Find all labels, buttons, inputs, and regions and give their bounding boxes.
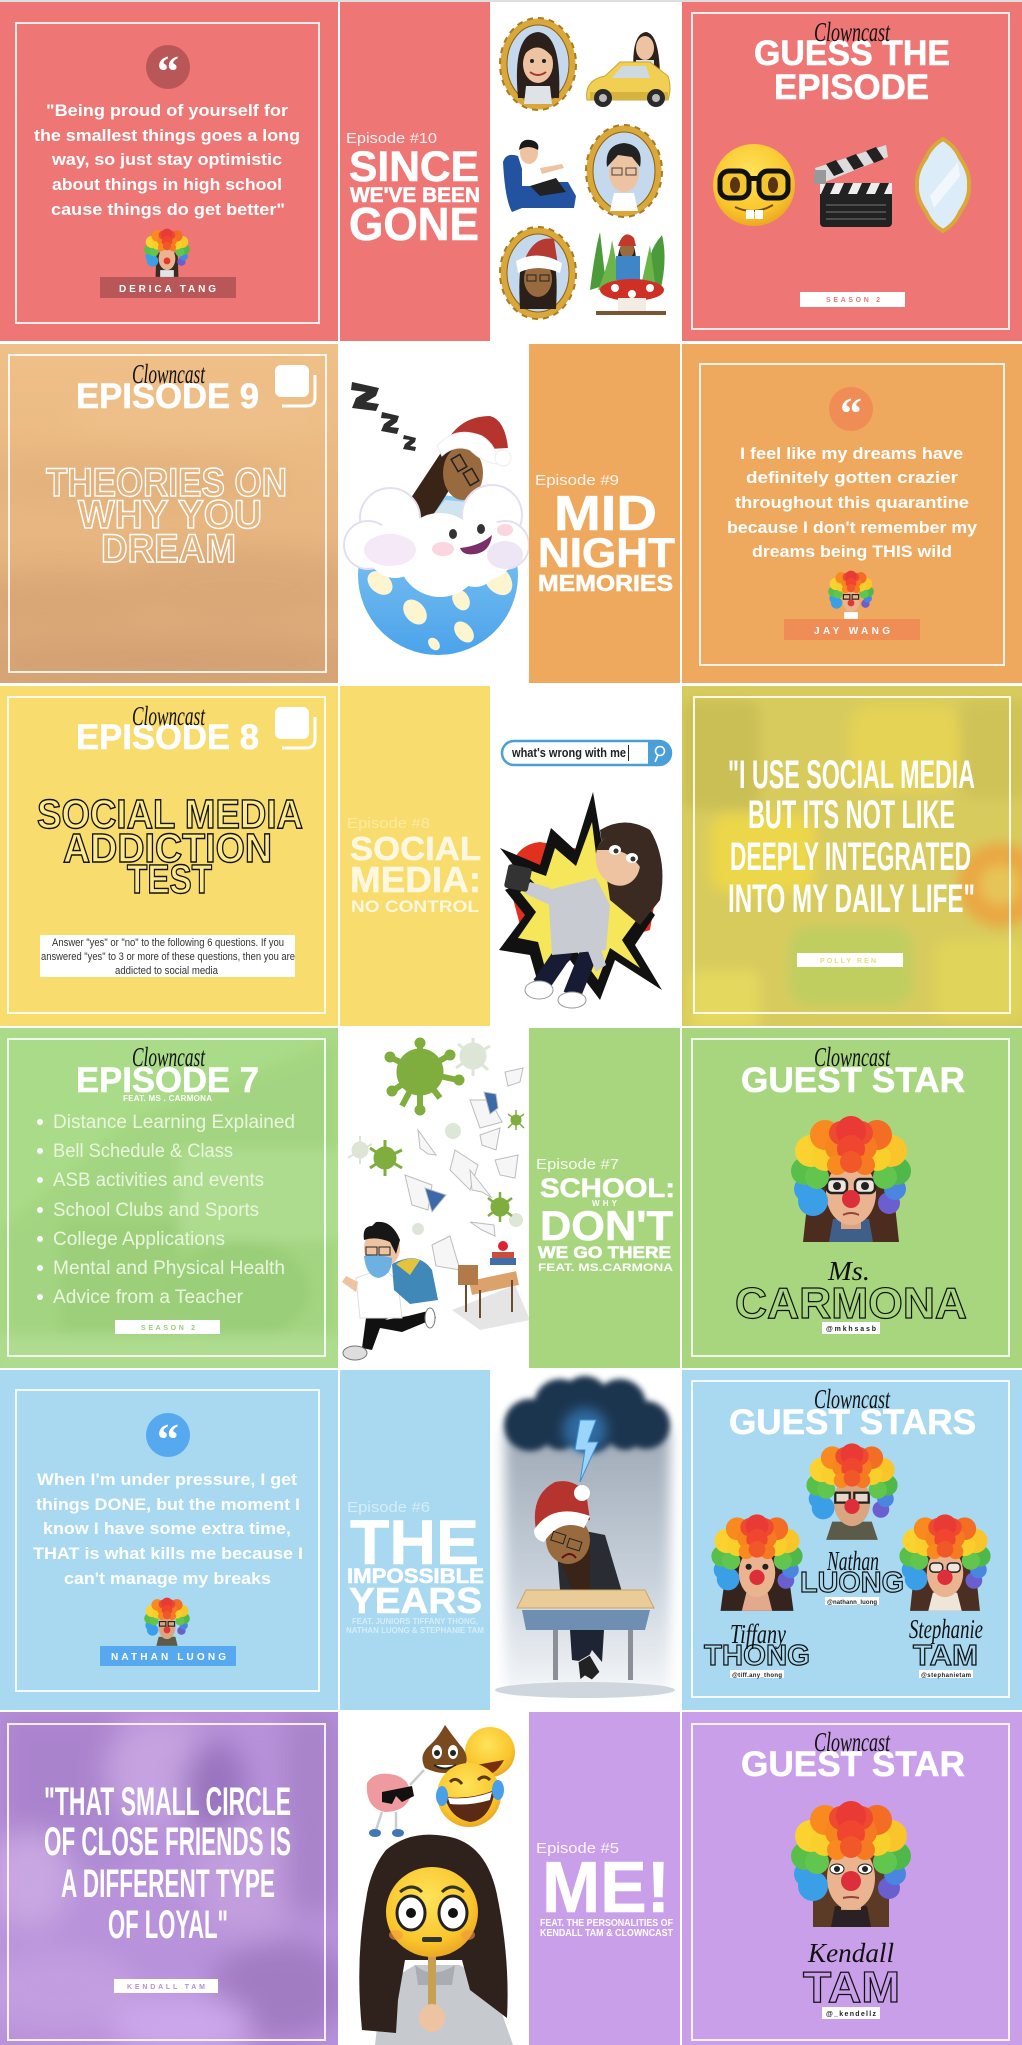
panel: episode 6 bitmoji [495,1376,675,1698]
outlined title: THEORIES ON [46,461,287,505]
panel: Jay Wang quote [682,344,1022,683]
name: Stephanie: Stephanie [909,1614,983,1644]
outlined title: WHY YOU [78,493,262,537]
heading: GUESS THE [754,34,950,73]
name: @mkhsasb [826,1326,876,1333]
name tag [797,953,903,967]
heading: GUEST STARS [729,1403,976,1442]
name tag: DERICA TANG [119,284,216,295]
globe [358,495,518,655]
heading [76,359,259,416]
name tag: NATHAN LUONG [111,1652,226,1663]
avatar: Tiffany [711,1514,803,1611]
background app icons [682,700,1022,1030]
quote text: OF LOYAL" [108,1903,228,1947]
outlined title: ADDICTION [63,825,272,871]
heading: Clowncast [814,17,891,47]
panel: episode 9 title: NIGHT [538,529,675,576]
explosion [499,792,662,1000]
quote text: because I don't remember my [727,518,978,537]
panel: episode 7 title: SCHOOL: [540,1173,675,1203]
name tag [114,1979,218,1993]
heading: EPISODE 7 [76,1061,259,1100]
mirror portrait girl [500,18,576,110]
topic list: College Applications [53,1229,225,1250]
instructions box [40,935,295,977]
lightning [563,1408,607,1482]
panel: Polly Ren quote [682,686,1022,1030]
heading: EPISODE [774,68,929,107]
panel: episode 10 title [340,2,490,341]
quote text [44,1780,291,1947]
quote text [33,1470,303,1588]
heading: GUEST STAR [741,1745,965,1784]
heading [76,1042,259,1103]
avatar: clown [828,571,874,619]
avatar: Nathan [806,1443,898,1540]
panel: Derica Tang quote [0,2,338,341]
season tag [115,1320,220,1334]
emoji: brain with sunglasses [367,1770,424,1837]
top edge [0,0,1022,2]
boy in recliner [503,140,576,212]
sad girl at desk [534,1481,622,1592]
name: Tiffany: Tiffany [730,1619,786,1649]
name: CARMONA [735,1279,967,1328]
girl reading on mushroom [590,232,666,315]
name tag [100,277,236,298]
panel: guest star Kendall Tam [682,1712,1022,2045]
panel: episode 5 title [529,1712,680,2045]
heading: GUEST STAR [741,1061,965,1100]
panel: episode 9 sleeping bitmoji [344,382,529,655]
avatar: Ms. Carmona clown [791,1116,911,1242]
name: Ms. [827,1256,870,1286]
outlined title [37,791,303,902]
panel: episode 8 bitmoji [499,741,671,1008]
quote text: the smallest things goes a long [34,126,300,145]
rain [505,1430,670,1692]
heading [729,1384,976,1442]
smiling cloud [344,485,529,597]
panel: episode 7 title: FEAT. MS.CARMONA [538,1262,673,1274]
running boy [342,1222,438,1360]
topic list: ASB activities and events [53,1170,264,1191]
heading: FEAT. MS . CARMONA [123,1094,212,1103]
background school photo [54,1214,316,1332]
icon: quote mark: “ [840,389,862,438]
panel: episode 8 title: SOCIAL [350,830,481,867]
panel: episode 6 title: IMPOSSIBLE [347,1565,484,1588]
viruses [348,1038,524,1235]
quote text [34,101,300,219]
desk and books [452,1241,530,1330]
name: Tiffany [704,1619,810,1679]
name [735,1256,967,1334]
search bar [502,741,671,765]
instructions box: Answer "yes" or "no" to the following 6 questions. If you [52,937,284,949]
heading: Clowncast [814,1384,891,1414]
panel: episode 7 title: DON'T [540,1202,673,1249]
panel: episode 7 topics [0,1028,338,1368]
flying papers [405,1068,523,1270]
background photo of friends [0,1712,350,2045]
icon: quote mark [146,1413,190,1464]
panel: episode 6 title: THE [350,1508,479,1578]
icon: quote mark [829,387,873,438]
quote text: way, so just stay optimistic [51,150,282,169]
heading [754,17,950,107]
name: Stephanie: @stephanietam [921,1673,971,1679]
emoji: tears of joy [436,1763,504,1827]
panel: episode 9 title [529,344,680,683]
outlined title: DREAM [101,527,236,571]
quote text: "Being proud of yourself for [46,101,288,120]
topic list: Distance Learning Explained [53,1112,295,1133]
panel: guest star Ms. Carmona [682,1028,1022,1368]
icon: carousel [275,365,315,406]
name: @_kendellz [826,2011,876,2018]
season tag: SEASON 2 [826,297,880,304]
icon: zzz [351,382,416,451]
panel: Nathan Luong quote [0,1370,338,1710]
heading: Clowncast [132,359,206,389]
mirror portrait santa hat [500,227,576,319]
panel: guess the episode [682,2,1022,341]
quote text: dreams being THIS wild [752,542,952,561]
panel: episode 8 title: Episode #8 [347,815,430,832]
outlined title: SOCIAL MEDIA [37,791,303,837]
heading [741,1042,965,1100]
panel: episode 5 bitmoji [359,1725,515,2045]
icon: clapperboard [814,145,892,227]
panel: Kendall Tam quote [0,1712,350,2045]
name: Nathan [800,1546,904,1606]
avatar: Kendall clown [791,1801,911,1927]
avatar: Stephanie [899,1514,991,1611]
icon: quote mark: “ [157,1415,179,1464]
panel: episode 5 title: KENDALL TAM & CLOWNCAST [540,1928,673,1939]
name [803,1938,900,2019]
season tag [800,292,905,307]
name tag [100,1646,236,1666]
panel: guest stars group [682,1370,1022,1710]
panel: episode 10 bitmoji collage [500,18,670,319]
quote text: know I have some extra time, [43,1519,291,1538]
school desk [495,1590,675,1698]
quote text: I feel like my dreams have [740,444,963,463]
name: Nathan: LUONG [800,1567,904,1599]
quote text [728,753,975,921]
panel: episode 7 title [529,1028,680,1368]
outlined title [46,461,287,571]
instructions box: answered "yes" to 3 or more of these questions, then you are [41,951,295,963]
quote text: OF CLOSE FRIENDS IS [44,1820,291,1864]
season tag: SEASON 2 [141,1325,195,1332]
topic list: Bell Schedule & Class [53,1141,233,1162]
panel: episode 10 title: SINCE [349,143,479,191]
name: Nathan: @nathann_luong [827,1600,877,1606]
sleeping girl [395,416,511,530]
icon: quote mark: “ [157,47,179,96]
heading: EPISODE 9 [76,377,259,416]
heading: EPISODE 8 [76,718,259,757]
name tag: JAY WANG [814,626,890,637]
panel: episode 7 bitmoji [342,1038,530,1360]
panel: episode 6 title [340,1370,490,1710]
quote text: can't manage my breaks [64,1569,271,1588]
panel: episode 5 title: FEAT. THE PERSONALITIES OF [540,1918,673,1929]
name: Tiffany: @tiff.any_thong [732,1673,782,1679]
name tag [784,619,920,640]
quote text: things DONE, but the moment I [36,1495,300,1514]
outlined title: TEST [127,856,212,902]
heading: Clowncast [132,701,206,731]
name: Kendall [807,1938,894,1968]
panel: episode 9 title: MID [554,487,657,541]
girl holding shocked emoji mask [359,1835,513,2045]
quote text [727,444,978,561]
panel: episode 8 title: MEDIA: [350,859,481,900]
panel: episode 9 title: Episode #9 [535,472,619,489]
panel: episode 6 title: FEAT. JUNIORS TIFFANY THONG, [352,1617,478,1626]
panel: episode 10 title: GONE [349,198,479,250]
quote text: When I'm under pressure, I get [37,1470,297,1489]
quote text: definitely gotten crazier [746,468,958,487]
panel: episode 8 addiction test [0,686,338,1026]
panel: episode 5 title: Episode #5 [536,1840,619,1857]
quote text: THAT is what kills me because I [33,1544,303,1563]
panel: episode 5 title: ME! [542,1848,670,1928]
topic list: School Clubs and Sports [53,1200,259,1221]
heading [76,701,259,757]
storm cloud [504,1376,670,1453]
emoji: laughing side [465,1727,515,1777]
name: Stephanie [909,1614,983,1679]
topic list: Mental and Physical Health [53,1258,285,1279]
name: Stephanie: TAM [913,1640,978,1672]
panel: episode 9 title: MEMORIES [538,570,673,596]
panel: episode 6 title: Episode #6 [347,1499,430,1516]
quote text: "THAT SMALL CIRCLE [44,1780,291,1824]
icon: carousel [275,707,315,748]
panel: episode 9 theories [0,344,360,683]
panel: episode 8 title [340,686,490,1026]
quote text: about things in high school [52,175,282,194]
heading: Clowncast [814,1727,891,1757]
quote text: A DIFFERENT TYPE [61,1862,275,1906]
name tag: POLLY REN [820,958,876,965]
quote text: throughout this quarantine [735,493,969,512]
panel: episode 8 title: NO CONTROL [351,897,479,916]
heading: Clowncast [814,1042,891,1072]
panel: episode 6 title: YEARS [349,1580,482,1621]
panel: episode 10 title: WE'VE BEEN [350,184,480,207]
girl in yellow car [587,32,670,107]
icon: gold mirror [917,139,969,231]
topic list [37,1112,295,1308]
panel: episode 7 title: WE GO THERE [538,1243,671,1262]
girl with phone [504,822,662,1008]
search bar: what's wrong with me [511,745,626,760]
icon: nerd face [713,144,795,226]
quote text: cause things do get better" [51,200,285,219]
topic list: Advice from a Teacher [53,1287,244,1308]
icon: quote mark [146,45,190,96]
heading [741,1727,965,1784]
name: Tiffany: THONG [704,1640,810,1672]
name: TAM [803,1963,900,2012]
instructions box: addicted to social media [115,965,219,977]
heading: Clowncast [132,1042,206,1072]
avatar: clown [144,1598,190,1646]
avatar: clown [144,229,190,277]
panel: episode 7 title: WHY [592,1199,618,1208]
panel: episode 10 title: Episode #10 [346,130,437,147]
name tag: KENDALL TAM [127,1984,205,1991]
name: Nathan: Nathan [826,1546,879,1576]
emoji: poop [422,1725,467,1773]
panel: episode 7 title: Episode #7 [536,1156,619,1173]
mirror portrait boy [586,125,662,217]
panel: episode 6 title: NATHAN LUONG & STEPHANIE TAM [346,1626,484,1635]
